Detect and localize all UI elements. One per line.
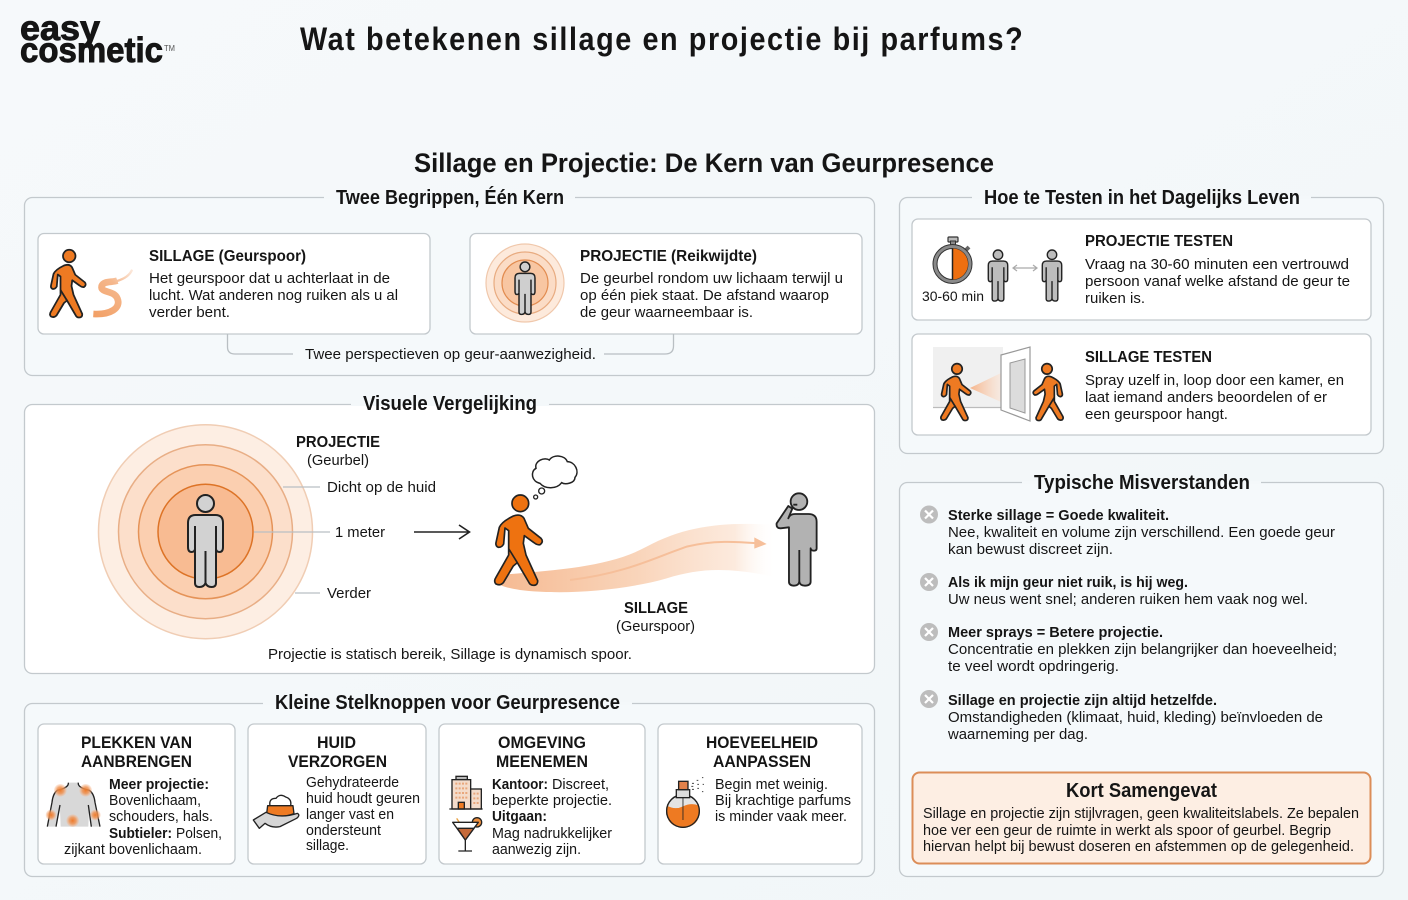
logo: easy cosmetic: TM — [164, 44, 175, 53]
misverstand 2: Als ik mijn geur niet ruik, is hij weg. — [948, 574, 1188, 591]
card: hoeveelheid aanpassen: Begin met weinig. — [715, 776, 828, 793]
card: projectie testen: persoon vanaf welke afstand de geur te — [1085, 273, 1350, 290]
card: projectie: PROJECTIE (Reikwijdte) — [580, 248, 757, 265]
illustration: sillage trail — [498, 524, 777, 592]
misverstand 2: Uw neus went snel; anderen ruiken hem vaak nog wel. — [948, 591, 1308, 608]
card: huid verzorgen: huid houdt geuren — [306, 790, 420, 807]
card: omgeving meenemen: Uitgaan: — [492, 808, 547, 825]
misverstand 2 — [920, 573, 1308, 608]
misverstand 4: Sillage en projectie zijn altijd hetzelfde. — [948, 692, 1217, 709]
label: 30-60 min: 30-60 min — [922, 288, 984, 304]
misverstand 4 — [920, 690, 1323, 743]
icon: cocktail glass — [453, 818, 482, 851]
misverstand 3: Concentratie en plekken zijn belangrijker dan hoeveelheid; — [948, 641, 1337, 658]
card: huid verzorgen: langer vast en — [306, 806, 394, 823]
card: huid verzorgen: HUID — [317, 733, 356, 752]
card: plekken van aanbrengen — [38, 724, 235, 864]
card: sillage: SILLAGE (Geurspoor) — [149, 248, 306, 265]
misverstand 1: Nee, kwaliteit en volume zijn verschillend. Een goede geur — [948, 524, 1335, 541]
card: omgeving meenemen: Mag nadrukkelijker — [492, 825, 612, 842]
logo: easy cosmetic: easy — [20, 9, 101, 48]
card: projectie — [470, 234, 862, 334]
icon: perfume bottle — [667, 778, 704, 827]
misverstand 4: waarneming per dag. — [947, 726, 1088, 743]
misverstand 3: te veel wordt opdringerig. — [948, 658, 1119, 675]
icon: upper body with application points — [46, 783, 101, 827]
misverstand 1: Sterke sillage = Goede kwaliteit. — [948, 507, 1169, 524]
card: plekken van aanbrengen: zijkant bovenlichaam. — [64, 841, 202, 858]
card: huid verzorgen: ondersteunt — [306, 822, 382, 839]
icon: sniffing person — [777, 493, 817, 586]
card: plekken van aanbrengen: Subtieler: — [109, 825, 172, 842]
card: plekken van aanbrengen: AANBRENGEN — [81, 752, 192, 771]
card: plekken van aanbrengen: Meer projectie: — [109, 776, 209, 793]
chart: projectie rings — [98, 425, 312, 639]
label: 1 meter: 1 meter — [335, 524, 385, 541]
card: omgeving meenemen: beperkte projectie. — [492, 792, 612, 809]
card: hoeveelheid aanpassen — [658, 724, 862, 864]
misverstand 1: kan bewust discreet zijn. — [948, 541, 1113, 558]
misverstand 3 — [920, 623, 1337, 675]
main heading: Sillage en Projectie: De Kern van Geurpresence — [414, 148, 994, 178]
card: plekken van aanbrengen: Bovenlichaam, — [109, 792, 201, 809]
arrow: projectie to sillage — [414, 525, 470, 539]
callout: kort samengevat: Kort Samengevat — [1066, 780, 1217, 802]
panel: twee begrippen — [24, 186, 874, 376]
card: projectie testen — [912, 219, 1371, 320]
callout: kort samengevat: hiervan helpt bij bewust doseren en afstemmen op de gelegenheid. — [923, 838, 1354, 855]
misverstand 4: Omstandigheden (klimaat, huid, kleding) beïnvloeden de — [948, 709, 1323, 726]
card: omgeving meenemen — [439, 724, 645, 864]
card: plekken van aanbrengen: Polsen, — [176, 825, 222, 842]
icon: office building — [449, 776, 483, 809]
label: sillage: (Geurspoor) — [616, 618, 695, 635]
logo: easy cosmetic — [20, 9, 175, 70]
callout: kort samengevat: Sillage en projectie zijn stijlvragen, geen kwaliteitslabels. Ze bepalen — [923, 805, 1359, 822]
heading: typische misverstanden: Typische Misverstanden — [1034, 472, 1250, 494]
heading: hoe te testen: Hoe te Testen in het Dagelijks Leven — [984, 187, 1300, 209]
card: projectie testen: ruiken is. — [1085, 290, 1145, 307]
callout: kort samengevat — [912, 772, 1370, 864]
icon: room with door and two walkers — [933, 347, 1063, 421]
card: huid verzorgen: sillage. — [306, 837, 349, 854]
card: huid verzorgen — [248, 724, 426, 864]
panel: hoe te testen — [900, 187, 1384, 454]
card: huid verzorgen: VERZORGEN — [288, 752, 387, 771]
connector caption: Twee perspectieven op geur-aanwezigheid. — [305, 346, 596, 363]
misverstand 1 — [920, 506, 1335, 558]
callout: kort samengevat: hoe ver een geur de ruimte in werkt als spoor of geurbel. Begrip — [923, 822, 1331, 839]
label: sillage — [616, 600, 695, 635]
card: projectie testen: Vraag na 30-60 minuten een vertrouwd — [1085, 256, 1349, 273]
heading: twee begrippen: Twee Begrippen, Één Kern — [336, 186, 564, 209]
card: hoeveelheid aanpassen: is minder vaak meer. — [715, 808, 847, 825]
label: projectie: PROJECTIE — [296, 434, 380, 451]
label: projectie: (Geurbel) — [307, 452, 369, 469]
card: sillage testen: SILLAGE TESTEN — [1085, 349, 1212, 366]
card: hoeveelheid aanpassen: Bij krachtige parfums — [715, 792, 851, 809]
label: projectie — [296, 434, 380, 469]
card: omgeving meenemen: OMGEVING — [498, 733, 586, 752]
icon: two persons with distance arrow — [988, 250, 1062, 301]
card: omgeving meenemen: Kantoor: — [492, 776, 548, 793]
icon: projectie rings — [486, 244, 564, 322]
card: plekken van aanbrengen: schouders, hals. — [109, 808, 213, 825]
card: hoeveelheid aanpassen: HOEVEELHEID — [706, 733, 818, 752]
card: sillage — [38, 234, 430, 334]
card: omgeving meenemen: Discreet, — [552, 776, 609, 793]
card: sillage testen — [912, 334, 1371, 435]
label: sillage: SILLAGE — [624, 600, 688, 617]
card: sillage testen: laat iemand anders beoordelen of er — [1085, 389, 1327, 406]
card: sillage testen: een geurspoor hangt. — [1085, 406, 1228, 423]
label: verder: Verder — [327, 585, 371, 602]
panel: visuele vergelijking — [24, 393, 874, 674]
logo: easy cosmetic: cosmetic — [20, 31, 163, 70]
icon: sillage walker with trail — [50, 250, 132, 318]
card: projectie: De geurbel rondom uw lichaam terwijl u — [580, 270, 843, 287]
label: dicht op de huid: Dicht op de huid — [327, 479, 436, 496]
card: projectie testen: PROJECTIE TESTEN — [1085, 233, 1233, 250]
icon: stopwatch — [933, 237, 972, 284]
card: sillage: lucht. Wat anderen nog ruiken als u al — [149, 287, 398, 304]
card: sillage testen: Spray uzelf in, loop door een kamer, en — [1085, 372, 1344, 389]
icon: hand with cream jar — [253, 795, 299, 828]
card: huid verzorgen: Gehydrateerde — [306, 774, 399, 791]
card: projectie: de geur waarneembaar is. — [580, 304, 753, 321]
card: projectie: op één piek staat. De afstand waarop — [580, 287, 829, 304]
card: omgeving meenemen: MEENEMEN — [496, 752, 588, 771]
heading: kleine stelknoppen: Kleine Stelknoppen voor Geurpresence — [275, 692, 620, 714]
panel: typische misverstanden — [900, 472, 1384, 876]
caption: visuele vergelijking: Projectie is statisch bereik, Sillage is dynamisch spoor. — [268, 646, 632, 663]
card: hoeveelheid aanpassen: AANPASSEN — [713, 752, 811, 771]
misverstand 3: Meer sprays = Betere projectie. — [948, 624, 1163, 641]
title: Wat betekenen sillage en projectie bij parfums? — [300, 22, 1023, 57]
card: sillage: verder bent. — [149, 304, 230, 321]
icon: walking person with thought cloud — [495, 456, 577, 585]
panel: kleine stelknoppen — [24, 692, 874, 876]
card: omgeving meenemen: aanwezig zijn. — [492, 841, 581, 858]
heading: visuele vergelijking: Visuele Vergelijking — [363, 393, 537, 415]
card: sillage: Het geurspoor dat u achterlaat in de — [149, 270, 390, 287]
card: plekken van aanbrengen: PLEKKEN VAN — [81, 733, 192, 752]
